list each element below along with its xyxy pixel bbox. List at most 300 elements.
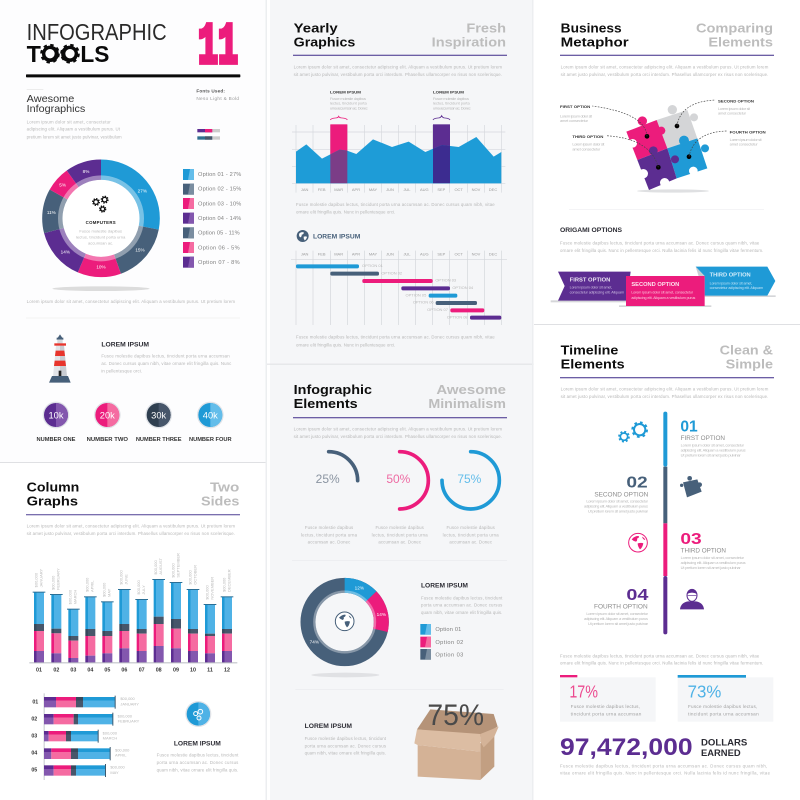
heading: timeline elements: Elements: [561, 357, 625, 372]
origami ribbons: [551, 267, 776, 307]
text block: LOREM IPSUM: [305, 724, 352, 730]
horizontal bar chart: 04: [31, 751, 37, 757]
column axis labels: 05: [104, 667, 110, 673]
ribbon: third option: consectetur adipiscing elit. Aliquam: [710, 286, 763, 290]
intro text: sit amet justo pulvinar, vestibulum porta orci interdum. Phasellus ullamcorper ex risus non scelerisque.: [294, 72, 502, 77]
gantt chart: DEC: [489, 252, 497, 257]
gantt chart: OPTION 07: [427, 307, 449, 312]
callout: september: urna accumsan ac. Donec: [433, 106, 471, 111]
heading: column graphs: Column: [27, 480, 79, 495]
column value labels: $00,000: [187, 569, 192, 585]
caption: [560, 654, 763, 666]
icon: gears: [93, 196, 108, 212]
heading: column graphs: [26, 480, 240, 515]
area chart: JUN: [386, 187, 394, 192]
heading: timeline elements: Clean &: [720, 343, 773, 358]
area chart: FEB: [318, 187, 326, 192]
text block: LOREM IPSUM: [101, 343, 149, 349]
callout: march: lectus, tincidunt porta: [330, 101, 367, 106]
subheading block: Lorem ipsum dolor sit amet, consectetur: [27, 120, 111, 125]
column value labels: SEPTEMBER: [175, 553, 180, 578]
gauge: 50 percent: Fusce molestie dapibus: [375, 525, 424, 530]
puzzle label: first option: Lorem ipsum dolor sit: [560, 113, 593, 118]
heading: business metaphor: Elements: [708, 35, 773, 50]
ribbon shadows: [551, 295, 776, 307]
area chart: APR: [352, 187, 360, 192]
stat: 17 percent: [560, 675, 656, 722]
puzzle label: fourth option: [730, 129, 766, 147]
puzzle label: second option: [718, 98, 754, 116]
number eleven: 11: [198, 16, 238, 81]
timeline item 01: adipiscing elit. Aliquam a vestibulum purus: [681, 448, 746, 453]
text block: Fusce molestie dapibus lectus, tincidunt porta urna accumsan: [101, 354, 230, 359]
ribbon: third option: Lorem ipsum dolor sit amet,: [710, 281, 752, 285]
badge: number four: [189, 402, 232, 443]
gantt chart: OCT: [454, 252, 463, 257]
horizontal bar chart: $00,000: [115, 747, 130, 752]
area chart: AUG: [420, 187, 429, 192]
badge: number one: 10k: [48, 410, 64, 420]
column axis labels: 12: [224, 667, 230, 673]
puzzle label: first option: [560, 104, 593, 123]
column axis labels: 03: [70, 667, 76, 673]
gantt chart: MAY: [369, 252, 378, 257]
timeline item 03: 03: [680, 531, 702, 548]
panel: infographic tools: [26, 16, 241, 304]
gantt chart: JUL: [403, 252, 411, 257]
text block: LOREM IPSUM: [421, 583, 468, 589]
ribbon: second option: SECOND OPTION: [631, 282, 679, 288]
puzzle label: third option: THIRD OPTION: [572, 134, 603, 139]
column axis labels: 08: [156, 667, 162, 673]
column axis labels: [36, 667, 230, 673]
area chart: DEC: [489, 187, 497, 192]
timeline item 01: Lorem ipsum dolor sit amet, consectetur: [681, 443, 745, 448]
panel: statistics: [560, 654, 773, 776]
column value labels: MARCH: [73, 590, 78, 604]
stat: 73 percent: [678, 675, 773, 722]
donut chart: 12%: [355, 585, 364, 590]
column value labels: $00,000: [136, 579, 141, 595]
ribbon: first option: consectetur adipiscing elit. Aliquam: [570, 291, 624, 295]
caption: vitae ornare elit fringilla quis. Nunc in pellentesque orci. Nulla lacinia felis id nunc fringilla, vitae: [560, 771, 771, 776]
donut chart: [308, 585, 386, 659]
text block: porta urna accumsan ac. Donec cursus: [305, 743, 386, 748]
gauge: 75 percent: accumsan ac. Donec: [449, 540, 493, 545]
donut chart: 8%: [83, 169, 89, 174]
column axis labels: 10: [190, 667, 196, 673]
heading: column graphs: Two: [210, 480, 239, 495]
icon: globe: [335, 612, 354, 631]
horizontal bar chart: 05: [31, 768, 37, 774]
legend: Option 07 - 8%: [198, 260, 240, 266]
column axis labels: 04: [87, 667, 93, 673]
gauge: 25 percent: Fusce molestie dapibus: [305, 525, 353, 530]
column value labels: $00,000: [221, 577, 226, 592]
heading: yearly graphics: Yearly: [294, 20, 338, 35]
timeline item 02: [584, 475, 649, 514]
callout: september: Fusce molestie dapibus: [433, 96, 469, 101]
gantt chart: OPTION 01: [362, 263, 384, 268]
column value labels: $00,000: [170, 562, 175, 578]
badge: number one: [36, 402, 76, 443]
icon: puzzle piece: [680, 476, 702, 497]
timeline bar: [663, 412, 667, 634]
text block: in pellentesque orci.: [101, 368, 142, 373]
callout: september: LOREM IPSUM: [433, 89, 465, 94]
intro text: Lorem ipsum dolor sit amet, consectetur adipiscing elit. Aliquam a vestibulum purus. Ut pretium lorem: [27, 523, 235, 528]
heading: yearly graphics: Graphics: [294, 35, 355, 50]
timeline item 04: Ut pretium lorem sit amet justo pulvinar: [588, 621, 649, 626]
timeline item 01: 01: [680, 419, 698, 436]
gauge: 25 percent: accumsan ac. Donec: [308, 540, 351, 545]
callout: march: urna accumsan ac. Donec: [330, 106, 368, 111]
horizontal bar chart: $00,000: [118, 713, 133, 718]
gauge: 75 percent: [442, 452, 499, 545]
column value labels: DECEMBER: [226, 569, 231, 592]
column value labels: $00,000: [51, 575, 56, 590]
ribbon: first option: [558, 272, 631, 301]
fonts used: Fonts Used:: [196, 88, 225, 93]
heading: infographic elements: [293, 382, 507, 418]
puzzle label: first option: amet consectetur: [560, 118, 589, 123]
gantt chart: APR: [352, 252, 360, 257]
gantt heading: LOREM IPSUM: [313, 233, 361, 240]
caption: [296, 202, 495, 214]
area chart: [292, 124, 505, 193]
stat: 73 percent: tincidunt porta urna accumsan: [688, 711, 759, 716]
donut chart: 5%: [59, 182, 66, 187]
heading: timeline elements: Simple: [726, 357, 773, 372]
text block: quam nibh, vitae ornare elit fringilla quis.: [305, 751, 386, 756]
caption: Lorem ipsum dolor sit amet, consectetur adipiscing elit. Aliquam a vestibulum purus. Ut pretium lorem: [27, 299, 235, 304]
panel: yearly graphics background: [270, 0, 532, 800]
gantt chart: SEP: [437, 252, 446, 257]
column value labels: APRIL: [90, 580, 95, 592]
legend: Option 01 - 27%: [198, 172, 241, 178]
legend: [183, 169, 241, 268]
puzzle shadow: [637, 189, 709, 193]
ribbon: second option: [626, 276, 705, 306]
donut shadow: [52, 286, 150, 291]
intro text: [27, 523, 235, 536]
horizontal bar chart: 01: [32, 700, 38, 706]
origami text: ornare elit fringilla quis. Nunc in pellentesque orci. Nulla lacinia felis id nunc fringilla vitae fermentum.: [560, 248, 763, 253]
badge: number two: 20k: [100, 410, 115, 420]
icon: person: [680, 589, 704, 609]
legend: Option 01: [435, 627, 461, 633]
intro text: sit amet justo pulvinar, vestibulum porta orci interdum. Phasellus ullamcorper ex risus non scelerisque.: [561, 72, 768, 77]
heading: timeline elements: [560, 343, 774, 378]
panel: business metaphor: [560, 20, 774, 193]
area chart: NOV: [472, 187, 481, 192]
donut chart: Fusce molestie dapibus: [79, 229, 122, 234]
callout: september: [433, 89, 471, 120]
gauge: 75 percent: 75%: [457, 472, 482, 486]
intro text: Lorem ipsum dolor sit amet, consectetur adipiscing elit. Aliquam a vestibulum purus. Ut pretium lorem: [561, 386, 769, 391]
title: infographic tools: LS: [80, 41, 109, 67]
badge: number one: NUMBER ONE: [36, 437, 76, 443]
timeline item 04: FOURTH OPTION: [594, 604, 648, 611]
caption: Fusce molestie dapibus lectus, tincidunt porta urna accumsan ac. Donec cursus quam nibh, vitae: [296, 202, 495, 207]
title: infographic tools: T: [27, 41, 41, 67]
timeline item 02: 02: [626, 475, 648, 492]
column value labels: [33, 553, 231, 604]
title: infographic tools: INFOGRAPHIC: [27, 19, 167, 45]
icon: globe: [629, 533, 647, 552]
horizontal bar chart: [31, 693, 140, 780]
column value labels: $00,000: [102, 582, 107, 597]
gauge: 50 percent: lectus, tincidunt porta urna: [372, 532, 428, 537]
panel: origami and timeline heading: [534, 209, 800, 399]
intro text: Lorem ipsum dolor sit amet, consectetur adipiscing elit. Aliquam a vestibulum purus. Ut pretium lorem: [294, 426, 502, 431]
gauge: 50 percent: [372, 452, 428, 545]
panel: lighthouse and numbers: [0, 318, 267, 536]
gauge: 25 percent: lectus, tincidunt porta urna: [301, 532, 358, 537]
column axis labels: 02: [53, 667, 59, 673]
area chart: OCT: [454, 187, 463, 192]
icon: blue badge: [185, 701, 211, 727]
column value labels: MAY: [107, 588, 112, 597]
colour swatch bars: [197, 129, 220, 140]
stat: 17 percent: tincidunt porta urna accumsan: [571, 711, 642, 716]
column value labels: JULY: [141, 585, 146, 595]
title: infographic tools: OO: [41, 41, 79, 67]
big number: dollars earned: EARNED: [701, 748, 741, 758]
puzzle label: third option: [572, 134, 605, 151]
donut shadow: [311, 673, 379, 677]
gauge: 75 percent: Fusce molestie dapibus: [446, 525, 495, 530]
stat: 73 percent: Fusce molestie dapibus lectus,: [688, 704, 757, 709]
heading: timeline elements: Timeline: [561, 343, 618, 358]
column value labels: $00,000: [204, 584, 209, 600]
gantt chart: OPTION 03: [435, 278, 457, 283]
column value labels: JANUARY: [38, 568, 43, 587]
horizontal bar chart: 02: [31, 717, 37, 723]
timeline item 03: Ut pretium lorem sit amet justo pulvinar: [681, 565, 741, 570]
gantt chart: JUN: [386, 252, 394, 257]
big number: dollars earned: DOLLARS: [701, 738, 747, 748]
heading: business metaphor: Business: [561, 20, 622, 35]
legend: Option 02: [435, 640, 463, 646]
title: infographic tools: [27, 19, 167, 67]
text block: ac. Donec cursus quam nibh, vitae ornare elit fringilla quis. Nunc: [101, 361, 232, 366]
timeline item 01: Ut pretium lorem sit amet justo pulvinar: [681, 453, 741, 458]
horizontal bar chart: $00,000: [110, 765, 126, 770]
timeline item 04: [584, 587, 649, 626]
legend: Option 03 - 10%: [198, 201, 241, 207]
title rule: [26, 74, 240, 77]
column value labels: $00,000: [68, 589, 73, 604]
donut chart: 14%: [377, 612, 386, 617]
badge: number two: [87, 402, 128, 443]
icon: lighthouse: [49, 334, 71, 383]
text block: [305, 724, 387, 756]
caption: ornare elit fringilla quis. Nunc in pellentesque orci.: [296, 209, 395, 214]
text block: [157, 741, 239, 772]
heading: business metaphor: [560, 20, 774, 56]
panel: timeline: [584, 412, 746, 634]
ribbon: first option: Lorem ipsum dolor sit amet,: [570, 285, 612, 289]
gantt chart: OPTION 08: [447, 314, 468, 319]
text block: quam nibh, vitae ornare elit fringilla quis.: [421, 610, 502, 615]
ribbon: third option: [696, 267, 775, 296]
badge: number four: 40k: [203, 410, 218, 420]
gauge: 25 percent: 25%: [316, 472, 340, 486]
callout: march: LOREM IPSUM: [330, 89, 362, 94]
intro text: [294, 64, 502, 77]
intro text: Lorem ipsum dolor sit amet, consectetur adipiscing elit. Aliquam a vestibulum purus. Ut pretium lorem: [294, 64, 502, 69]
gauge: 75 percent: lectus, tincidunt porta urna: [443, 532, 499, 537]
area chart: SEP: [437, 187, 446, 192]
gantt chart: AUG: [420, 252, 429, 257]
heading: yearly graphics: Inspiration: [432, 35, 506, 50]
subheading block: Infographics: [27, 104, 86, 115]
panel: gantt chart: [267, 202, 534, 365]
legend: Option 06 - 5%: [198, 245, 240, 251]
timeline item 02: Lorem ipsum dolor sit amet, consectetur: [586, 499, 649, 504]
gantt chart: JAN: [301, 252, 309, 257]
callout: march: [330, 89, 368, 120]
callout: march: Fusce molestie dapibus: [330, 96, 366, 101]
column axis labels: 11: [207, 667, 213, 673]
donut chart: [47, 169, 150, 270]
ribbon: second option: adipiscing elit. Aliquam a vestibulum purus: [631, 296, 696, 300]
column chart: [29, 579, 237, 663]
column axis labels: 06: [121, 667, 127, 673]
horizontal bar chart: MAY: [110, 770, 119, 775]
badge: number three: NUMBER THREE: [136, 437, 182, 443]
gantt chart: OPTION 05: [406, 292, 427, 297]
timeline item 01: FIRST OPTION: [681, 435, 725, 442]
heading: infographic elements: Awesome: [436, 382, 506, 397]
horizontal bar chart: 03: [31, 734, 37, 740]
caption: [560, 763, 771, 776]
timeline item 04: Lorem ipsum dolor sit amet, consectetur: [586, 611, 649, 616]
gauge: 50 percent: accumsan ac. Donec: [378, 540, 422, 545]
legend: Option 04 - 14%: [198, 216, 241, 222]
puzzle label: second option: amet consectetur: [718, 111, 747, 116]
area chart: MAR: [334, 187, 343, 192]
callout: september: lectus, tincidunt porta: [433, 101, 470, 106]
column value labels: $00,000: [119, 569, 124, 585]
subheading block: adipiscing elit. Aliquam a vestibulum purus. Ut: [27, 127, 121, 132]
timeline item 02: SECOND OPTION: [594, 491, 649, 498]
column value labels: $00,000: [33, 572, 38, 587]
subheading block: [27, 89, 122, 139]
caption: [296, 335, 495, 347]
icon: cardboard box: 75%: [427, 699, 484, 732]
legend: Option 05 - 11%: [198, 231, 240, 237]
horizontal bar chart: MARCH: [103, 736, 117, 741]
heading: column graphs: Sides: [201, 493, 239, 508]
heading: yearly graphics: Fresh: [466, 20, 506, 35]
caption: Fusce molestie dapibus lectus, tincidunt porta urna accumsan ac. Donec cursus quam nibh, vitae: [296, 335, 495, 340]
text block: Fusce molestie dapibus lectus, tincidunt: [305, 736, 387, 741]
column axis labels: 01: [36, 667, 42, 673]
intro text: [561, 386, 769, 399]
timeline item 04: adipiscing elit. Aliquam a vestibulum purus: [584, 616, 648, 621]
badge: number four: NUMBER FOUR: [189, 437, 232, 443]
column value labels: AUGUST: [158, 557, 163, 575]
donut chart: 74%: [310, 639, 319, 644]
text block: porta urna accumsan ac. Donec cursus: [421, 603, 502, 608]
donut chart: 11%: [47, 210, 56, 215]
text block: Fusce molestie dapibus lectus, tincidunt: [157, 753, 239, 758]
gantt chart: NOV: [472, 252, 481, 257]
panel: yearly graphics: [292, 20, 507, 193]
horizontal bar chart: $00,000: [120, 696, 136, 701]
icon: gears: [619, 422, 647, 442]
origami text: [560, 241, 763, 253]
panel: second donut and box: [295, 583, 504, 780]
icon: globe: [297, 230, 309, 242]
gantt chart: OPTION 04: [452, 285, 474, 290]
intro text: Lorem ipsum dolor sit amet, consectetur adipiscing elit. Aliquam a vestibulum purus. Ut pretium lorem: [561, 64, 769, 69]
column value labels: $00,000: [153, 559, 158, 575]
big number: dollars earned: [560, 734, 747, 761]
puzzle label: fourth option: FOURTH OPTION: [730, 129, 766, 134]
column value labels: OCTOBER: [192, 565, 197, 585]
origami text: Fusce molestie dapibus lectus, tincidunt porta urna accumsan ac. Donec cursus quam nibh, vitae: [560, 241, 760, 246]
caption: ornare elit fringilla quis. Nunc in pellentesque orci. Nulla lacinia felis id nunc fringilla vitae fermentum.: [560, 661, 763, 666]
column value labels: NOVEMBER: [209, 577, 214, 600]
timeline item 01: [680, 419, 746, 458]
intro text: sit amet justo pulvinar, vestibulum porta orci interdum. Phasellus ullamcorper ex risus non scelerisque.: [27, 531, 235, 536]
timeline item 02: adipiscing elit. Aliquam a vestibulum purus: [584, 504, 648, 509]
column axis labels: 09: [173, 667, 179, 673]
intro text: [561, 64, 769, 77]
donut chart: 15%: [135, 248, 145, 253]
gantt chart: OPTION 06: [413, 300, 434, 305]
gantt chart: MAR: [334, 252, 343, 257]
heading: infographic elements: Elements: [294, 396, 358, 411]
donut chart: accumsan ac.: [88, 241, 113, 246]
donut chart: 10%: [96, 265, 106, 270]
intro text: sit amet justo pulvinar, vestibulum porta orci interdum. Phasellus ullamcorper ex risus non scelerisque.: [561, 394, 768, 399]
puzzle label: third option: amet consectetur: [572, 146, 601, 151]
heading: business metaphor: Metaphor: [561, 35, 629, 50]
horizontal bar chart: FEBRUARY: [118, 719, 140, 724]
heading: infographic elements: Minimalism: [428, 396, 506, 411]
puzzle graphic: [592, 100, 727, 190]
heading: yearly graphics: [293, 20, 507, 56]
subheading block: Awesome: [27, 94, 74, 105]
horizontal bar chart: JANUARY: [120, 702, 139, 707]
puzzle label: second option: SECOND OPTION: [718, 98, 754, 103]
gantt chart: FEB: [318, 252, 326, 257]
area chart: JAN: [301, 187, 309, 192]
heading: origami options: ORIGAMI OPTIONS: [560, 228, 622, 234]
timeline item 02: Ut pretium lorem sit amet justo pulvinar: [588, 509, 649, 514]
badge: number three: 30k: [151, 410, 167, 420]
text block: LOREM IPSUM: [174, 741, 221, 747]
gauge: 25 percent: [301, 452, 358, 545]
fonts used: Neso Light & Bold: [196, 96, 239, 101]
column value labels: FEBRUARY: [56, 568, 61, 590]
caption: Fusce molestie dapibus lectus, tincidunt porta urna accumsan ac. Donec cursus quam nibh, vitae: [560, 654, 760, 659]
puzzle label: fourth option: amet consectetur: [730, 142, 758, 147]
panel: infographic elements: [292, 382, 507, 561]
stat: 73 percent: 73%: [688, 681, 721, 701]
badge: number three: [136, 402, 182, 443]
icon: cardboard box: [414, 699, 499, 780]
ribbon: first option: FIRST OPTION: [570, 277, 610, 283]
timeline item 03: [680, 531, 746, 570]
ribbon: second option: Lorem ipsum dolor sit amet, consectetur: [631, 291, 694, 295]
text block: porta urna accumsan ac. Donec cursus: [157, 760, 238, 765]
puzzle label: third option: Lorem ipsum dolor sit: [572, 142, 605, 147]
